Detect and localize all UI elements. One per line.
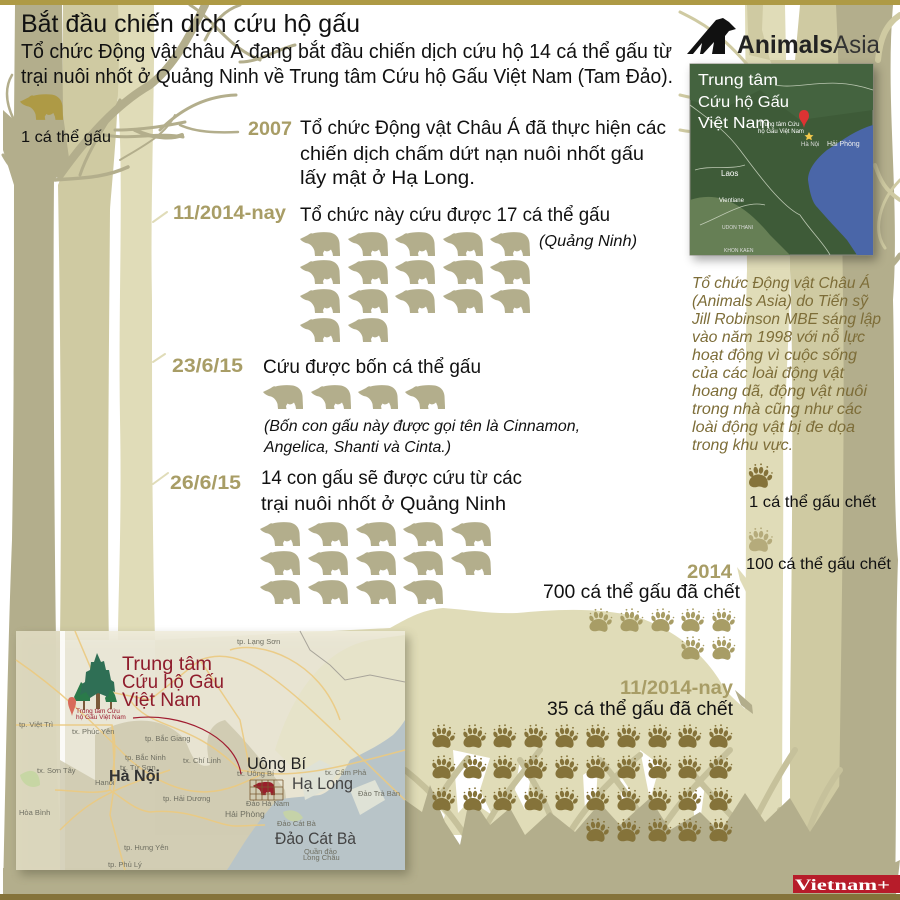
heading: rescue centre [122, 654, 224, 711]
timeline 2007: Tổ chức Động vật Châu Á đã thực hiện các [300, 118, 666, 139]
legend: 1 bear: 1 cá thể gấu [21, 128, 111, 146]
satellite map: KHON KAEN [724, 248, 754, 254]
city labels: Đảo Cát Bà [275, 829, 356, 848]
timeline 11/2014-nay: 17 bears: 11/2014-nay [173, 203, 286, 224]
timeline 11/2014-nay: 17 bears: (Quảng Ninh) [539, 233, 637, 250]
satellite map: hộ Gấu Việt Nam [758, 129, 804, 135]
small map labels: Đảo Cát Bà [277, 819, 317, 828]
timeline 26/6/15: 14 bears [170, 468, 522, 604]
heading: rescue centre: Trung tâm [122, 654, 212, 675]
timeline 23/6/15: 4 bears: Angelica, Shanti và Cinta.) [263, 439, 451, 456]
satellite map: Trung tâm Cứu [759, 122, 799, 128]
satellite map: Hà Nội [801, 142, 819, 148]
small map labels: tp. Hải Dương [163, 794, 210, 803]
pin label: Trung tâm Cứu [76, 708, 120, 715]
2014 deaths [543, 562, 741, 660]
timeline 26/6/15: 14 bears: trại nuôi nhốt ở Quảng Ninh [261, 494, 506, 515]
logo: Vietnam+: Vietnam+ [795, 877, 890, 894]
satellite map: Trung tâm [698, 72, 778, 89]
timeline 2007: chiến dịch chấm dứt nạn nuôi nhốt gấu [300, 144, 644, 165]
small map labels [19, 637, 400, 869]
small map labels: tx. Sơn Tây [37, 766, 76, 775]
intro text: trại nuôi nhốt ở Quảng Ninh về Trung tâm Cứu hộ Gấu Việt Nam (Tam Đảo). [21, 66, 673, 88]
small map labels: tp. Lạng Sơn [237, 637, 280, 646]
timeline 26/6/15: 14 bears: 26/6/15 [170, 473, 241, 494]
italic paragraph about Animals Asia: của các loài động vật [692, 365, 845, 382]
2014 deaths: 2014 [687, 562, 732, 583]
small map labels: Hòa Bình [19, 808, 50, 817]
icon: caged bear [250, 780, 283, 800]
city labels: Hạ Long [292, 774, 353, 793]
title: Bắt đầu chiến dịch cứu hộ gấu [21, 9, 360, 38]
timeline 23/6/15: 4 bears [172, 356, 580, 456]
small map labels: tx. Uông Bí [237, 769, 275, 778]
map pin [799, 110, 809, 128]
pin label: hộ Gấu Việt Nam [76, 712, 126, 721]
heading: rescue centre: Việt Nam [122, 690, 201, 711]
timeline 2007: 2007 [248, 119, 292, 140]
icon: location pin [68, 697, 76, 716]
background: grass [3, 567, 900, 895]
small map labels: Đảo Hà Nam [246, 799, 289, 808]
small map labels: tx. Phúc Yên [72, 727, 114, 736]
right trees [745, 5, 790, 860]
2014 deaths: 700 cá thể gấu đã chết [543, 582, 741, 603]
sea [227, 720, 405, 870]
italic paragraph about Animals Asia: Tổ chức Động vật Châu Á [692, 273, 870, 292]
timeline 23/6/15: 4 bears: (Bốn con gấu này được gọi tên là Cinnamon, [264, 418, 580, 435]
icon: pine tree [74, 653, 117, 710]
italic paragraph about Animals Asia [691, 273, 881, 454]
intro text [21, 40, 673, 88]
timeline 23/6/15: 4 bears: 23/6/15 [172, 356, 243, 377]
italic paragraph about Animals Asia: trong khu vực. [692, 437, 793, 454]
timeline 2007: lấy mật ở Hạ Long. [300, 168, 475, 189]
timeline 11/2014-nay: 17 bears [173, 203, 637, 342]
left trees [107, 5, 155, 640]
timeline 23/6/15: 4 bears: Cứu được bốn cá thể gấu [263, 357, 481, 378]
legend: 100 dead bears [746, 527, 892, 573]
bottom bar [0, 894, 900, 900]
italic paragraph about Animals Asia: Jill Robinson MBE sáng lập [691, 311, 881, 328]
small map labels: tx. Cẩm Phả [325, 768, 367, 777]
legend: 1 bear [20, 94, 111, 146]
small map labels: tp. Hưng Yên [124, 843, 168, 852]
city labels [109, 754, 356, 848]
bear-shaped hillside [155, 608, 760, 835]
top bar [0, 0, 900, 5]
satellite map: Cứu hộ Gấu [698, 94, 789, 111]
satellite map: Vientiane [719, 198, 745, 204]
satellite map: Laos [721, 169, 738, 178]
11/2014-nay deaths: 11/2014-nay [620, 678, 733, 699]
legend: 1 dead bear [748, 463, 877, 511]
small map labels: tx. Từ Sơn [120, 763, 156, 772]
legend: 100 dead bears: 100 cá thể gấu chết [746, 555, 892, 573]
small map labels: tp. Việt Trì [19, 720, 53, 729]
logo: Animals Asia: Asia [833, 31, 880, 59]
small map labels: Long Châu [303, 853, 340, 862]
city labels: Uông Bí [247, 754, 306, 773]
satellite map: Hải Phòng [827, 141, 860, 148]
pin label [76, 708, 126, 721]
small map labels: tp. Bắc Ninh [125, 753, 166, 762]
small map labels: tx. Chí Linh [183, 756, 221, 765]
small map labels: Đảo Trà Bản [358, 789, 400, 798]
small map labels: tp. Phủ Lý [108, 860, 142, 869]
11/2014-nay deaths: 35 cá thể gấu đã chết [547, 699, 734, 720]
intro text: Tổ chức Động vật châu Á đang bắt đầu chiến dịch cứu hộ 14 cá thể gấu từ [21, 40, 672, 63]
small map labels: Hanoi [95, 778, 115, 787]
logo: Animals Asia: Animals [737, 31, 833, 59]
city labels: Hà Nội [109, 768, 160, 785]
satellite map: Việt Nam [698, 115, 770, 132]
small map labels: Quần đảo [304, 847, 337, 856]
italic paragraph about Animals Asia: hoạt động vì cuộc sống [692, 347, 857, 364]
italic paragraph about Animals Asia: trong nhà cũng như các [692, 401, 862, 418]
italic paragraph about Animals Asia: (Animals Asia) do Tiến sỹ [692, 293, 869, 310]
italic paragraph about Animals Asia: loài động vật bị đe dọa [692, 419, 855, 436]
small map labels: Hải Phòng [225, 809, 265, 819]
logo: Animals Asia [687, 18, 880, 59]
timeline 2007 [248, 118, 666, 189]
timeline 26/6/15: 14 bears: 14 con gấu sẽ được cứu từ các [261, 468, 522, 489]
satellite map [690, 64, 877, 260]
route arc [133, 717, 241, 774]
italic paragraph about Animals Asia: vào năm 1998 với nỗ lực [692, 327, 865, 346]
small map labels: tp. Bắc Giang [145, 734, 190, 743]
logo: Vietnam+ [793, 875, 900, 894]
road map of rescue route [16, 631, 409, 875]
white gaps in the grass [436, 750, 705, 828]
italic paragraph about Animals Asia: hoang dã, động vật nuôi [692, 383, 867, 400]
legend: 1 dead bear: 1 cá thể gấu chết [749, 493, 877, 511]
11/2014-nay deaths [431, 678, 734, 842]
heading: rescue centre: Cứu hộ Gấu [122, 672, 224, 693]
satellite map: UDON THANI [722, 225, 753, 231]
timeline 11/2014-nay: 17 bears: Tổ chức này cứu được 17 cá thể gấu [300, 205, 610, 226]
